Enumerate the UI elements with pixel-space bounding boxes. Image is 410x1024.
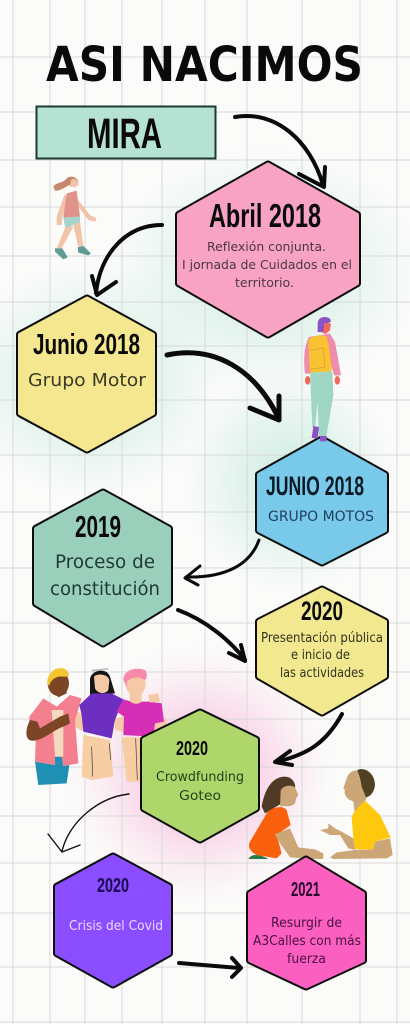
panel: Abril 2018: territorio. [235, 275, 294, 290]
panel: 2021 Resurgir [250, 860, 363, 986]
panel: 2020 Presentacion publica [259, 590, 385, 712]
panel: 2020 Crowdfunding Goteo: Crowdfunding [156, 769, 244, 785]
panel: MIRA: MIRA [87, 110, 162, 158]
panel: Abril 2018: I jornada de Cuidados en el [182, 257, 352, 272]
arrow: Crisis del Covid to 2021 [179, 958, 241, 977]
panel: 2021 Resurgir: A3Calles con más [253, 934, 361, 949]
icon: girl with backpack [304, 317, 341, 441]
arrow: 2019 to 2020 Presentacion [178, 610, 245, 661]
panel: Abril 2018: Abril 2018 [209, 197, 321, 234]
panel: JUNIO 2018 Grupo Motos [259, 440, 385, 562]
panel: 2020 Presentacion publica: Presentación pública [261, 631, 383, 646]
skin details [75, 710, 167, 735]
arrow: Abril 2018 to Junio 2018 [92, 225, 162, 295]
woman [248, 855, 268, 859]
title: ASI NACIMOS [46, 37, 363, 93]
panel: 2020 Crisis del Covid [57, 856, 169, 984]
panel: 2020 Presentacion publica: las actividades [280, 666, 364, 681]
panel: 2020 Crisis del Covid: 2020 [97, 875, 129, 897]
panel: Junio 2018 Grupo Motor: Grupo Motor [28, 370, 147, 391]
panel: 2021 Resurgir: Resurgir de [271, 916, 342, 931]
panel: 2020 Crisis del Covid: Crisis del Covid [69, 919, 163, 934]
panel: 2020 Presentacion publica: e inicio de [291, 648, 350, 663]
panel: Abril 2018: Reflexión conjunta. [207, 239, 326, 254]
panel: 2020 Crowdfunding Goteo: Goteo [179, 788, 221, 804]
icon: walking girl [53, 177, 97, 259]
panel: 2019 Proceso de constitucion: Proceso de [55, 551, 155, 573]
panel: 2019 Proceso de constitucion: 2019 [75, 509, 121, 544]
illustration: group of three friends [26, 668, 167, 785]
arrow: Grupo Motos to 2019 [185, 540, 259, 585]
panel: MIRA [36, 106, 216, 158]
woman in purple [82, 735, 113, 780]
arrow: Junio 2018 to Junio 2018 Grupo Motos [167, 353, 279, 420]
illustration: two people talking [248, 769, 393, 859]
panel: 2020 Crowdfunding Goteo [144, 712, 256, 840]
panel: 2021 Resurgir: 2021 [291, 879, 320, 901]
panel: 2021 Resurgir: fuerza [287, 952, 326, 967]
man [343, 770, 368, 815]
panel: Junio 2018 Grupo Motor [20, 298, 153, 450]
panel: 2020 Presentacion publica: 2020 [301, 596, 343, 626]
arrow: Presentacion to Crowdfunding [275, 714, 342, 765]
panel: 2020 Crowdfunding Goteo: 2020 [176, 738, 208, 760]
panel: 2019 Proceso de constitucion [36, 492, 169, 644]
panel: Abril 2018 [179, 164, 357, 334]
panel: JUNIO 2018 Grupo Motos: GRUPO MOTOS [268, 509, 374, 525]
arrow: Crowdfunding to Crisis del Covid [48, 794, 129, 852]
panel: 2019 Proceso de constitucion: constitución [50, 578, 160, 600]
panel: Junio 2018 Grupo Motor: Junio 2018 [33, 329, 140, 361]
woman in magenta [122, 737, 147, 782]
arrow: MIRA to Abril 2018 [235, 116, 325, 187]
man [35, 757, 69, 785]
